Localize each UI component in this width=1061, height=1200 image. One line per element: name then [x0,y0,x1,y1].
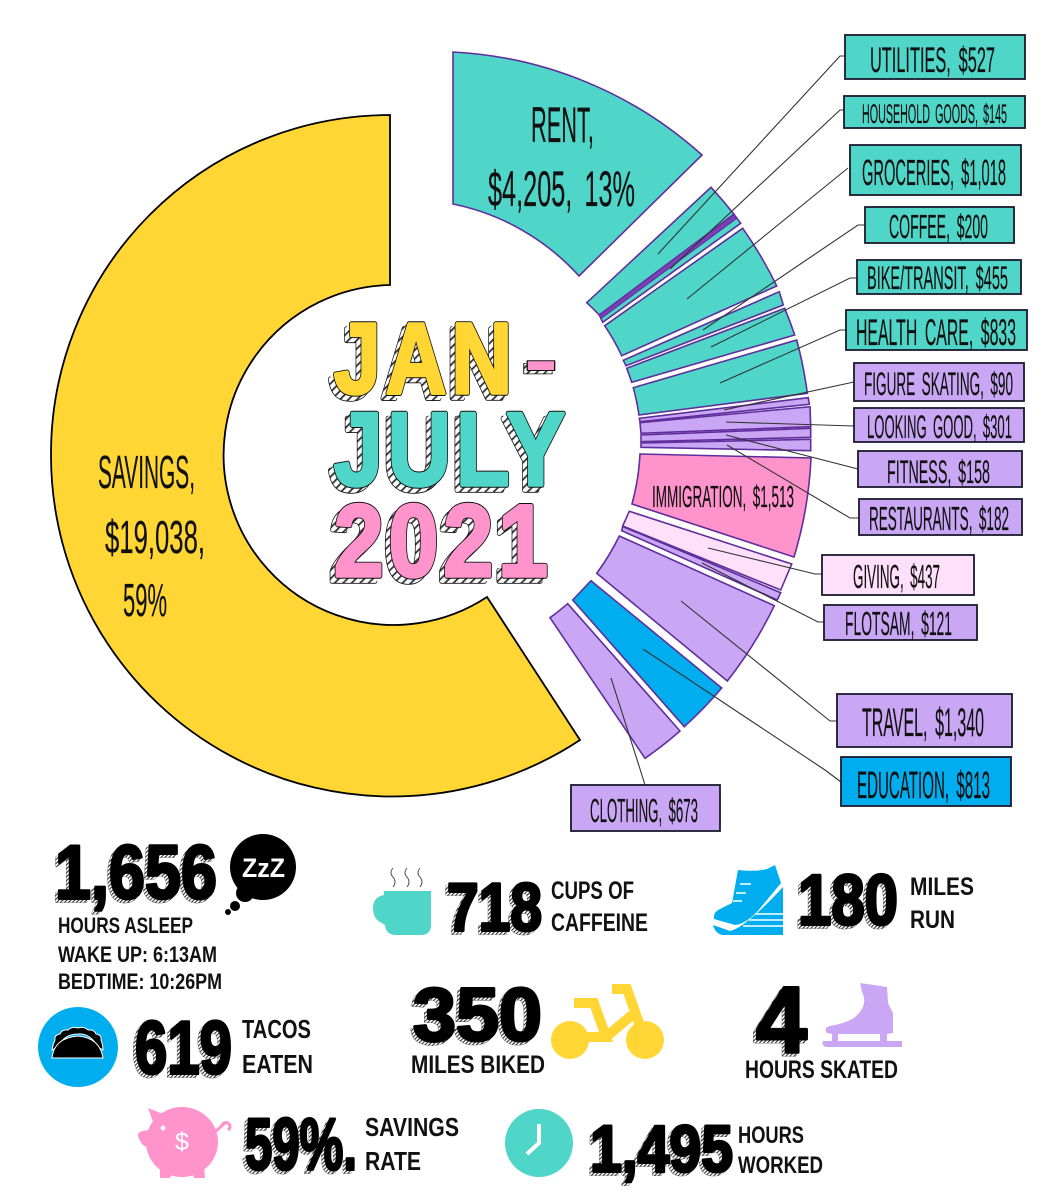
text: miles run: RUN [910,906,955,934]
icon: taco [38,1007,118,1087]
segment: education [573,581,722,727]
label: household goods [844,96,1025,129]
segment: immigration [632,454,811,557]
text: CLOTHING, $673 [590,792,698,829]
text: hours worked [738,1122,823,1179]
text: cups of caffeine: CAFFEINE [551,909,648,937]
number: 180: 180 [795,864,895,944]
label: groceries [850,145,1021,195]
number: 4: 4 [753,970,804,1075]
stat: miles run [713,862,974,944]
text: hours worked: WORKED [738,1152,823,1179]
text: hours worked: HOURS [738,1122,804,1149]
stat: tacos eaten [38,1006,313,1092]
icon: coffee cup [373,868,431,935]
stat: cups of caffeine [373,868,648,948]
text: miles biked: MILES BIKED [411,1051,545,1079]
savings label: $19,038, [105,511,205,563]
icon: piggy bank [138,1107,230,1178]
icon: sleep bubble [225,834,296,915]
stat: hours skated [745,967,902,1084]
segment: travel [597,536,774,681]
icon: clock [505,1109,573,1177]
text: cups of caffeine [551,877,648,937]
savings label: 59% [123,574,167,626]
text: tacos eaten [242,1014,313,1079]
text: sleep details: BEDTIME: 10:26PM [58,969,222,994]
text: miles run: MILES [910,873,974,901]
text: savings rate: SAVINGS [365,1112,459,1142]
text: sleep details [58,913,222,994]
label: travel [837,694,1012,747]
text: tacos eaten: TACOS [242,1014,311,1044]
segment: health care [633,340,807,415]
segment: looking good [640,407,811,433]
savings label: SAVINGS, [98,446,195,498]
text: tacos eaten: EATEN [242,1049,313,1079]
rent label: $4,205, 13% [488,161,635,217]
label: fitness [858,451,1022,490]
title line: JULY: JULY [329,397,565,513]
segment: figure skating [639,398,809,422]
label: coffee [865,207,1014,245]
icon: bicycle [551,989,664,1059]
segment: coffee [623,292,783,366]
label: utilities [845,35,1025,80]
text: cups of caffeine: CUPS OF [551,877,634,905]
rent label: RENT, [531,97,594,153]
label: giving: GIVING, $437 [853,558,940,595]
number: 1,656: 1,656 [52,834,214,918]
savings segment [51,115,580,797]
rent label [488,97,635,217]
text: savings rate [365,1112,459,1176]
title line: JAN-: JAN [329,308,512,420]
stat: hours asleep [52,830,296,994]
segment: household goods [599,214,741,322]
savings label [98,446,205,626]
number: 619: 619 [132,1008,229,1092]
leader lines [611,56,865,785]
number: 1,495: 1,495 [587,1114,730,1188]
label: education [841,757,1011,807]
text: miles run [910,873,974,934]
segment: bike and transit [627,308,795,382]
title line: JAN-: - [520,317,556,408]
stat: hours worked [505,1109,823,1188]
segment: clothing [550,604,680,758]
segment: restaurants [641,439,811,451]
icon: piggy bank: $ [175,1128,189,1156]
number: 718: 718 [444,872,539,948]
segment: giving [623,511,792,590]
icon: sleep bubble: ZzZ [242,853,285,883]
segment: household goods band [599,214,736,318]
text: sleep details: WAKE UP: 6:13AM [58,942,217,967]
icon: ice skate [822,983,902,1047]
text: sleep details: HOURS ASLEEP [58,913,193,938]
segment: fitness [641,428,811,442]
text: hours skated: HOURS SKATED [745,1056,898,1084]
title [329,303,570,603]
number: 350: 350 [410,976,539,1060]
text: savings rate: RATE [365,1146,421,1176]
number: 59%. [242,1104,357,1188]
segment: utilities [587,187,734,315]
label: giving [822,555,974,595]
number: 59%.: 59%. [242,1108,354,1188]
stat: miles biked [410,972,664,1079]
icon: running shoe [713,865,783,935]
segment: groceries [605,228,777,356]
label: flotsam [824,605,977,642]
title line: 2021: 2021 [329,489,548,603]
text: IMMIGRATION, $1,513 [652,479,794,514]
stat: savings rate [138,1104,459,1188]
rent segment [453,52,702,276]
label: clothing [571,785,720,831]
segment: flotsam [622,526,781,600]
